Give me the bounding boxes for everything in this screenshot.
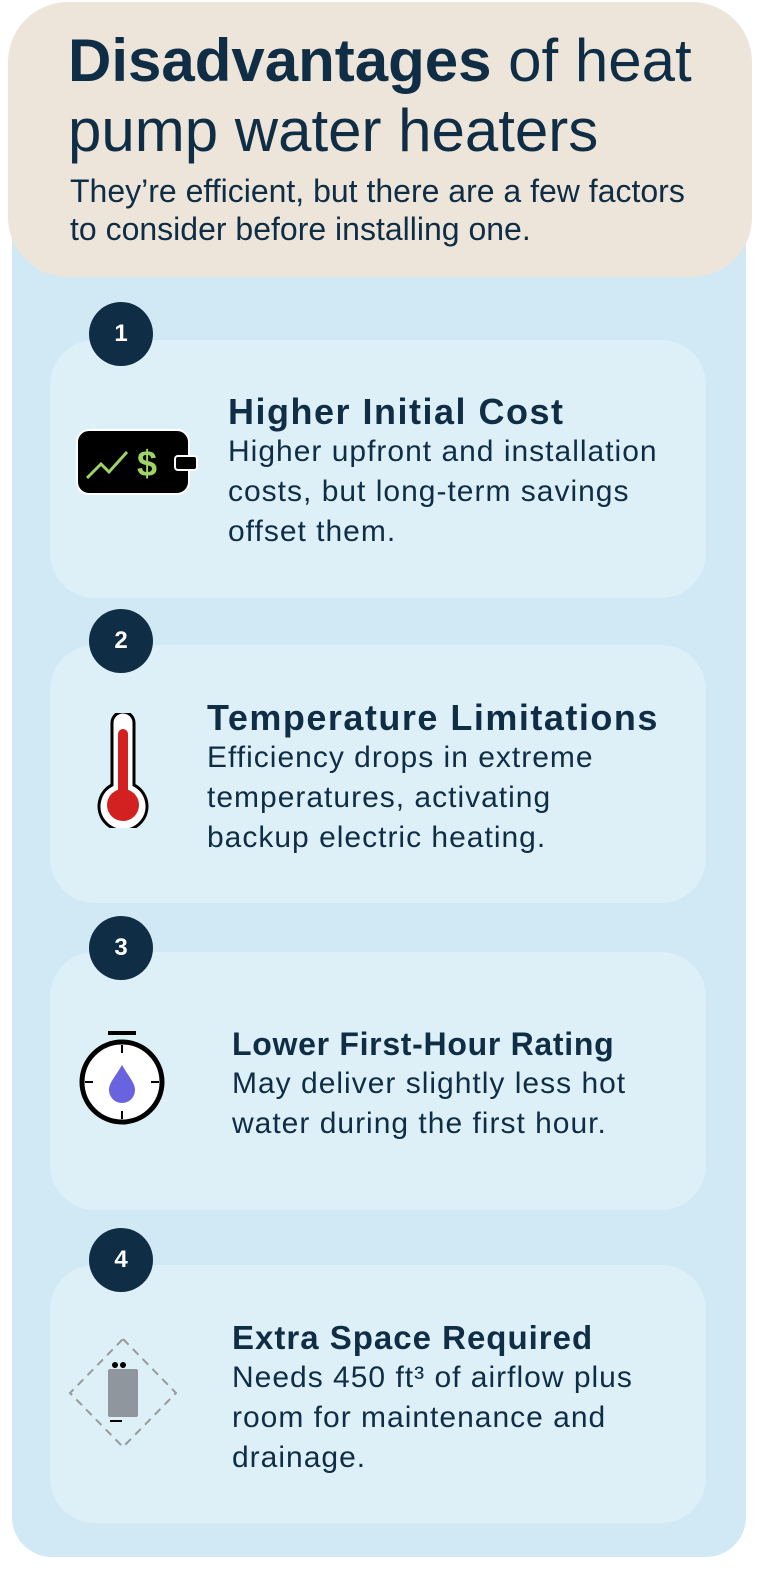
subtitle xyxy=(70,173,685,247)
number 2: 2 xyxy=(114,627,128,654)
text: Lower First-Hour Rating xyxy=(232,1026,614,1062)
text: room for maintenance and xyxy=(232,1401,606,1434)
number 3 xyxy=(89,916,153,980)
text: Efficiency drops in extreme xyxy=(207,741,594,774)
number 1 xyxy=(89,302,153,366)
text: water during the first hour. xyxy=(232,1107,607,1140)
number 4 xyxy=(89,1228,153,1292)
text: Temperature Limitations xyxy=(207,697,659,738)
icon: space diagram xyxy=(68,1338,178,1446)
icon: wallet: $ xyxy=(137,443,157,484)
card 4 xyxy=(50,1265,706,1523)
number 4: 4 xyxy=(114,1246,128,1273)
subtitle: They’re efficient, but there are a few factors xyxy=(70,173,685,209)
number 3: 3 xyxy=(114,934,128,961)
text xyxy=(228,391,658,548)
text: costs, but long-term savings xyxy=(228,475,630,508)
text: Higher Initial Cost xyxy=(228,391,565,432)
title xyxy=(68,27,692,164)
text xyxy=(232,1319,633,1474)
text: backup electric heating. xyxy=(207,821,546,854)
text xyxy=(232,1026,626,1140)
card 1 xyxy=(50,340,706,598)
number 2 xyxy=(89,609,153,673)
text: drainage. xyxy=(232,1441,366,1474)
icon: stopwatch with drop xyxy=(80,1031,164,1124)
header panel xyxy=(8,2,752,277)
card 2 xyxy=(50,645,706,903)
subtitle: to consider before installing one. xyxy=(70,211,531,247)
text: temperatures, activating xyxy=(207,781,551,814)
card 3 xyxy=(50,952,706,1210)
text: May deliver slightly less hot xyxy=(232,1067,626,1100)
text xyxy=(207,697,659,854)
title: pump water heaters xyxy=(68,97,598,164)
text: Needs 450 ft³ of airflow plus xyxy=(232,1361,633,1394)
text: Higher upfront and installation xyxy=(228,435,658,468)
text: offset them. xyxy=(228,515,396,548)
text: Extra Space Required xyxy=(232,1319,593,1356)
icon: wallet xyxy=(76,429,198,495)
icon: thermometer xyxy=(98,713,148,828)
title: Disadvantages of heat xyxy=(68,27,692,94)
number 1: 1 xyxy=(114,320,128,347)
